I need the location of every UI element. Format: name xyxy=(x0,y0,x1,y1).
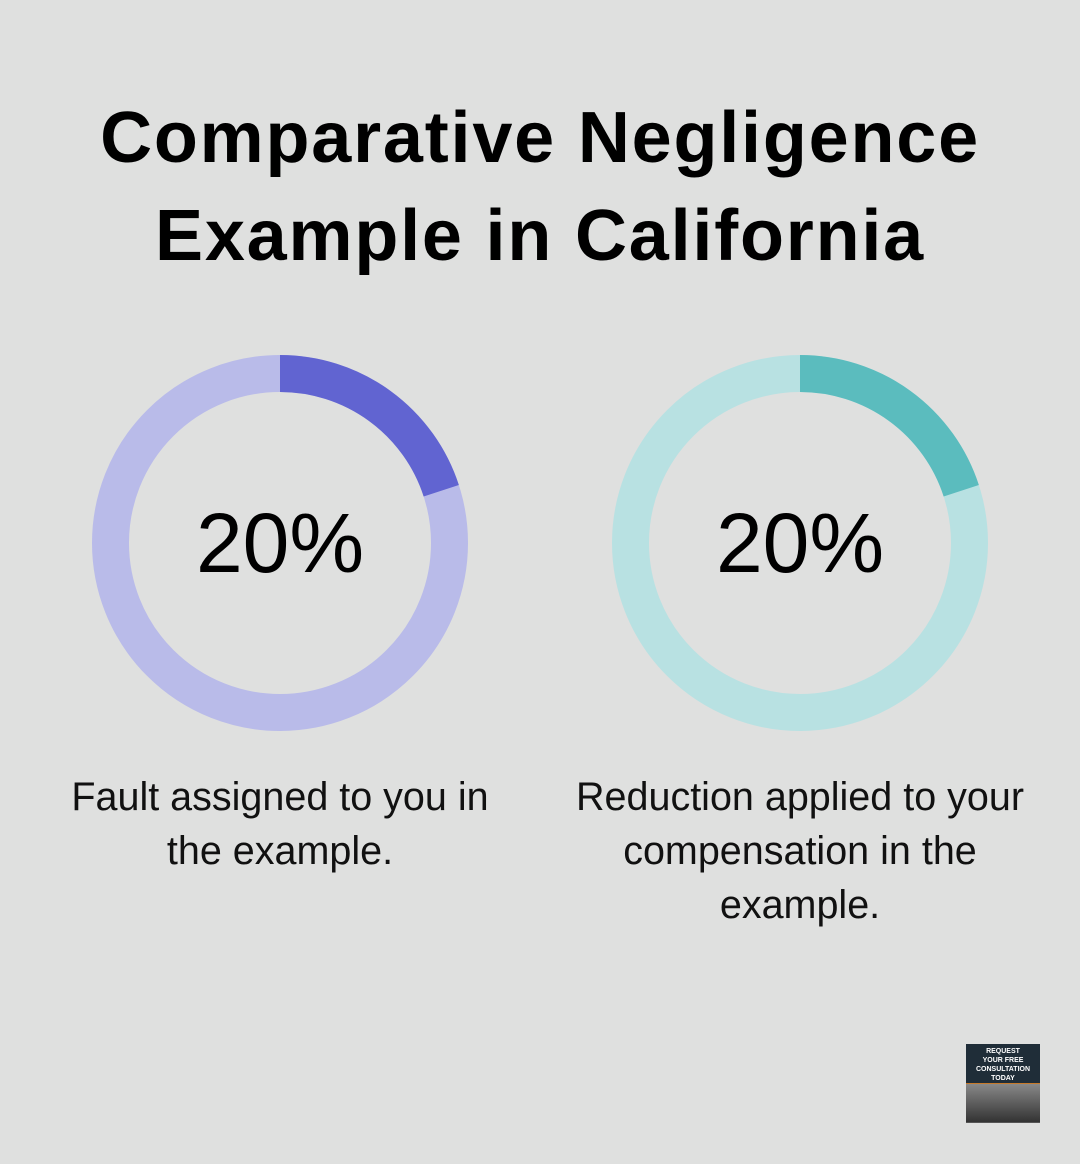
donut: fault xyxy=(92,355,468,731)
title: Example in California xyxy=(155,196,925,276)
label: reduction xyxy=(576,775,1024,927)
label: fault: the example. xyxy=(167,829,393,873)
title xyxy=(100,98,980,276)
label: reduction: Reduction applied to your xyxy=(576,775,1024,819)
label: fault: Fault assigned to you in xyxy=(71,775,489,819)
number: 20% fault: 20% xyxy=(196,496,364,590)
badge: consultation: CONSULTATION xyxy=(976,1066,1030,1073)
number: 20% reduction: 20% xyxy=(716,496,884,590)
badge: consultation xyxy=(966,1044,1040,1123)
badge: consultation: YOUR FREE xyxy=(983,1057,1023,1064)
donut: reduction xyxy=(612,355,988,731)
label: reduction: example. xyxy=(720,883,880,927)
label: reduction: compensation in the xyxy=(623,829,977,873)
label: fault xyxy=(71,775,489,873)
badge: consultation: TODAY xyxy=(991,1075,1015,1082)
badge: consultation: REQUEST xyxy=(986,1048,1020,1055)
title: Comparative Negligence xyxy=(100,98,980,178)
